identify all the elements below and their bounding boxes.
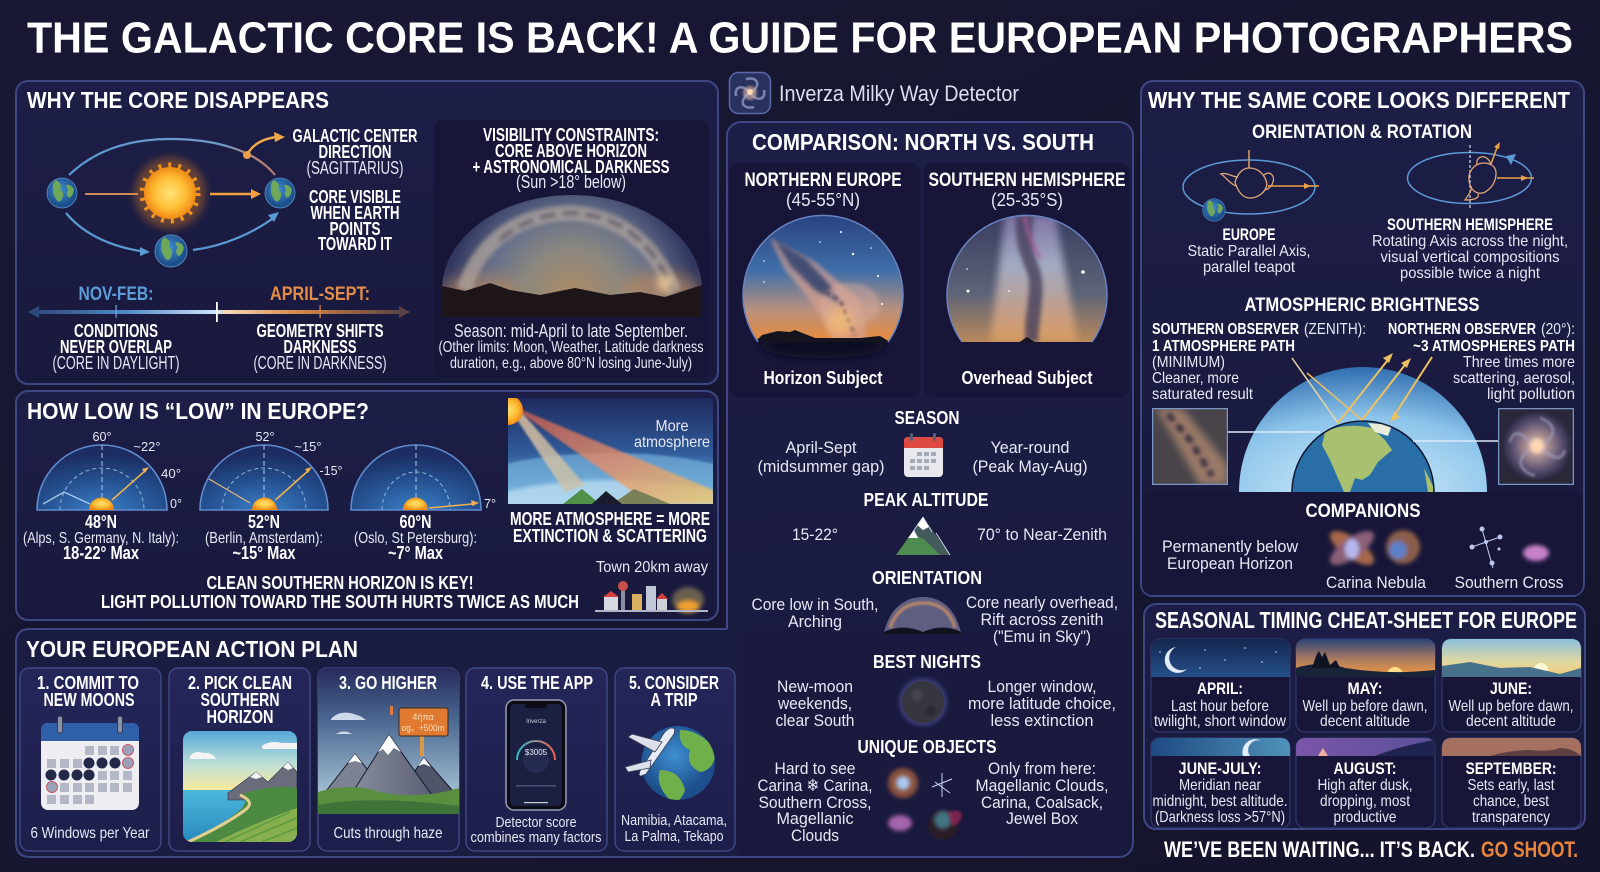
heading: action plan: YOUR EUROPEAN ACTION PLAN xyxy=(26,636,358,662)
card 2: pick clean southern horizon: HORIZON xyxy=(206,707,274,727)
label: galactic center direction xyxy=(292,126,418,178)
row: peak altitude xyxy=(792,490,1107,555)
card 1: commit to new moons: NEW MOONS xyxy=(44,690,134,710)
row: best nights xyxy=(776,652,1116,730)
row: season xyxy=(758,408,1088,477)
row: unique objects xyxy=(758,737,1108,845)
text: southern observer: Cleaner, more xyxy=(1152,370,1239,387)
inset: visibility constraints xyxy=(434,120,709,377)
icon: phone with detector score xyxy=(506,700,566,810)
text: 60N: 60°N xyxy=(400,512,432,532)
text: 52N: ~15° Max xyxy=(232,543,296,563)
row: best nights: New-moon xyxy=(777,677,853,696)
card 1: commit to new moons: 1. COMMIT TO xyxy=(37,673,139,693)
text: southern rotating axis: possible twice a night xyxy=(1400,265,1541,282)
panel: your european action plan xyxy=(16,629,745,857)
arrow: galactic center direction xyxy=(243,132,285,159)
diagram: atmosphere paths over earth xyxy=(1228,353,1498,492)
icon: mountain xyxy=(896,517,950,555)
text: southern observer: (MINIMUM) xyxy=(1152,354,1225,371)
subpanel: southern hemisphere: SOUTHERN HEMISPHERE xyxy=(928,170,1126,191)
text: 52N: (Berlin, Amsterdam): xyxy=(205,530,323,547)
image: southern cross and cloud xyxy=(1454,526,1564,592)
month: august: productive xyxy=(1334,809,1397,826)
label: core visible: CORE VISIBLE xyxy=(309,187,401,207)
text: april-sept geometry: DARKNESS xyxy=(284,337,356,357)
row: season: April-Sept xyxy=(786,438,857,457)
month: may xyxy=(1296,639,1435,732)
month: september xyxy=(1442,738,1581,828)
image: mountains with elevation sign: 4ήπα xyxy=(412,712,434,722)
image: milky way arch over mountains xyxy=(440,195,702,317)
icon: earth bottom xyxy=(155,235,187,267)
month: august xyxy=(1296,738,1435,828)
icon: phone with detector score: Inverza xyxy=(526,719,546,725)
text: southern observer: saturated result xyxy=(1152,386,1254,403)
subpanel: southern hemisphere xyxy=(924,163,1129,397)
text: season note: (Other limits: Moon, Weather, Latitude darkness xyxy=(438,339,704,356)
row: orientation: Rift across zenith xyxy=(980,610,1104,629)
row: orientation: Arching xyxy=(788,612,842,631)
icon: inverza app logo xyxy=(730,72,770,114)
card 5: consider a trip xyxy=(615,668,735,851)
image: southern cross and cloud: Southern Cross xyxy=(1454,573,1564,592)
month: april: twilight, short window xyxy=(1154,713,1286,730)
row: unique objects: Carina, Coalsack, xyxy=(981,793,1103,812)
icon: arched milky way xyxy=(884,597,961,634)
row: best nights: less extinction xyxy=(990,711,1094,730)
text: april-sept geometry xyxy=(254,321,386,373)
row: unique objects: UNIQUE OBJECTS xyxy=(858,737,996,757)
month: june-july: midnight, best altitude. xyxy=(1152,793,1288,810)
month: june-july: Meridian near xyxy=(1179,777,1262,794)
text: northern observer: scattering, aerosol, xyxy=(1453,370,1575,387)
month: april xyxy=(1151,639,1290,732)
chart: altitude at 60N: 7° xyxy=(484,496,496,511)
row: unique objects: Clouds xyxy=(791,826,839,845)
label: core visible: POINTS xyxy=(330,219,380,239)
month: september: SEPTEMBER: xyxy=(1466,759,1556,778)
timeline: season split: APRIL-SEPT: xyxy=(270,284,370,305)
row: unique objects: Only from here: xyxy=(988,759,1096,778)
row: peak altitude: 70° to Near-Zenith xyxy=(977,525,1107,544)
icon: phone with detector score: $3005 xyxy=(525,748,548,757)
text: visibility constraints: (Sun >18° below) xyxy=(516,172,626,192)
text: nov-feb conditions xyxy=(52,321,180,373)
row: season: SEASON xyxy=(894,408,960,428)
label: galactic center direction: GALACTIC CENTER xyxy=(292,126,418,146)
card 5: consider a trip: A TRIP xyxy=(650,690,698,710)
icon: earth left xyxy=(47,178,77,208)
heading: comparison: COMPARISON: NORTH VS. SOUTH xyxy=(752,129,1094,155)
text: southern observer xyxy=(1152,321,1366,403)
subpanel: northern europe: (45-55°N) xyxy=(786,190,860,210)
panel: why the core disappears xyxy=(16,81,718,384)
heading: why the core disappears: WHY THE CORE DISAPPEARS xyxy=(27,87,329,113)
icon: plane and globe xyxy=(625,726,716,801)
card 4: use the app xyxy=(466,668,607,851)
subpanel: southern hemisphere: (25-35°S) xyxy=(991,190,1063,210)
image: overhead subject dome xyxy=(946,214,1108,342)
text: northern observer: Three times more xyxy=(1463,354,1575,371)
text: europe static axis: EUROPE xyxy=(1222,225,1276,244)
timeline: season split: NOV-FEB: xyxy=(78,284,154,305)
row: peak altitude: 15-22° xyxy=(792,525,838,544)
image: carina nebula xyxy=(1325,525,1426,592)
row: peak altitude: PEAK ALTITUDE xyxy=(864,490,988,510)
label: more atmosphere: atmosphere xyxy=(634,434,710,451)
diagram: earth orbit around the sun xyxy=(47,132,295,267)
subheading: companions: COMPANIONS xyxy=(1306,501,1420,522)
callout: clean southern horizon: CLEAN SOUTHERN HORIZON IS KEY! xyxy=(206,573,474,593)
chart: altitude at 48N: 40° xyxy=(161,466,181,481)
text: nov-feb conditions: CONDITIONS xyxy=(74,321,158,341)
label: more atmosphere: More xyxy=(656,418,689,435)
month: april: APRIL: xyxy=(1197,679,1243,698)
row: best nights: Longer window, xyxy=(988,677,1096,696)
text: extinction and scattering: MORE ATMOSPHERE = MORE xyxy=(510,509,710,529)
footer call to action: GO SHOOT. xyxy=(1481,837,1578,862)
subheading: orientation and rotation: ORIENTATION & ROTATION xyxy=(1252,122,1472,143)
chart: altitude at 52N xyxy=(200,429,342,510)
row: orientation: Core nearly overhead, xyxy=(966,593,1118,612)
subpanel: southern hemisphere: Overhead Subject xyxy=(962,368,1092,388)
image: carina nebula: Carina Nebula xyxy=(1326,573,1426,592)
card 3: go higher xyxy=(318,668,459,851)
month: may: MAY: xyxy=(1348,679,1382,698)
chart: altitude at 48N xyxy=(37,429,182,511)
icon: sun xyxy=(134,157,206,229)
month: june: Well up before dawn, xyxy=(1448,698,1574,715)
card 5: consider a trip: 5. CONSIDER xyxy=(629,673,719,693)
card 3: go higher: 3. GO HIGHER xyxy=(339,673,437,693)
chart: altitude at 48N: 60° xyxy=(92,429,112,444)
row: orientation xyxy=(752,568,1118,646)
row: season: (Peak May-Aug) xyxy=(972,457,1088,476)
label: core visible: TOWARD IT xyxy=(318,234,392,254)
chart: altitude at 52N: -15° xyxy=(320,463,342,478)
card 1: commit to new moons xyxy=(20,668,161,851)
text: europe static axis: parallel teapot xyxy=(1203,259,1296,276)
text: southern observer: SOUTHERN OBSERVER xyxy=(1152,321,1299,338)
icon: calendar xyxy=(904,433,943,477)
footer call to action: WE’VE BEEN WAITING... IT’S BACK. xyxy=(1164,837,1475,862)
month: june-july: JUNE-JULY: xyxy=(1178,759,1262,778)
month: august: dropping, most xyxy=(1320,793,1410,810)
row: unique objects: Magellanic xyxy=(776,809,854,828)
chart: altitude at 60N xyxy=(351,445,496,511)
text: 52N xyxy=(205,512,323,563)
label: core visible: WHEN EARTH xyxy=(310,203,400,223)
panel: how low is low in europe xyxy=(16,391,800,620)
card 4: use the app: 4. USE THE APP xyxy=(481,673,593,693)
text: southern rotating axis: Rotating Axis across the night, xyxy=(1372,233,1568,250)
month: may: decent altitude xyxy=(1320,713,1410,730)
icon: earth right xyxy=(265,178,295,208)
card 4: use the app: combines many factors xyxy=(470,829,602,846)
chart: altitude at 48N: ~22° xyxy=(134,439,160,454)
card 5: consider a trip: La Palma, Tekapo xyxy=(624,828,724,845)
icon: new-moon calendar xyxy=(41,716,139,810)
row: unique objects: Southern Cross, xyxy=(758,793,872,812)
text: southern observer: 1 ATMOSPHERE PATH xyxy=(1152,338,1295,355)
card 2: pick clean southern horizon: 2. PICK CLEAN xyxy=(188,673,292,693)
text: southern rotating axis: SOUTHERN HEMISPHERE xyxy=(1387,215,1553,234)
row: best nights: clear South xyxy=(776,711,854,730)
card 1: commit to new moons: 6 Windows per Year xyxy=(30,825,150,842)
row: season: (midsummer gap) xyxy=(758,457,884,476)
month: june-july: (Darkness loss >57°N) xyxy=(1155,809,1285,826)
text: 60N xyxy=(354,512,477,563)
text: visibility constraints: VISIBILITY CONSTRAINTS: xyxy=(483,125,659,145)
text: visibility constraints: CORE ABOVE HORIZON xyxy=(495,141,647,161)
subheading: atmospheric brightness: ATMOSPHERIC BRIGHTNESS xyxy=(1244,295,1480,316)
image: sun beams through atmosphere xyxy=(508,398,713,504)
card 2: pick clean southern horizon: SOUTHERN xyxy=(200,690,280,710)
image: saturated milky way from south xyxy=(1152,408,1228,485)
card 3: go higher: Cuts through haze xyxy=(334,825,443,842)
month: june-july xyxy=(1151,738,1290,828)
image: mountains with elevation sign: og。+500m xyxy=(402,723,444,733)
row: unique objects: Jewel Box xyxy=(1006,809,1078,828)
row: orientation: ("Emu in Sky") xyxy=(993,627,1091,646)
callout: clean southern horizon xyxy=(101,573,579,612)
month: june xyxy=(1442,639,1581,732)
icon: town with light dome xyxy=(595,581,708,613)
text: extinction and scattering xyxy=(510,509,710,546)
icon: new moon xyxy=(899,678,947,726)
month: april: Last hour before xyxy=(1171,698,1269,715)
text: northern observer xyxy=(1388,321,1575,403)
label: more atmosphere xyxy=(634,418,710,451)
text: 60N: (Oslo, St Petersburg): xyxy=(354,530,477,547)
subpanel: northern europe: Horizon Subject xyxy=(764,368,882,388)
month: september: chance, best xyxy=(1473,793,1549,810)
month: may: Well up before dawn, xyxy=(1302,698,1428,715)
label: inverza milky way detector: Inverza Milky Way Detector xyxy=(779,81,1019,106)
text: northern observer: NORTHERN OBSERVER xyxy=(1388,321,1536,338)
text: southern rotating axis: visual vertical compositions xyxy=(1380,249,1560,266)
icons: deep sky objects xyxy=(888,768,962,840)
text: season note: Season: mid-April to late September. xyxy=(454,321,688,341)
text: 48N xyxy=(23,512,179,563)
callout: clean southern horizon: LIGHT POLLUTION TOWARD THE SOUTH HURTS TWICE AS MUCH xyxy=(101,592,579,612)
text: 48N: (Alps, S. Germany, N. Italy): xyxy=(23,530,179,547)
heading: how low is low: HOW LOW IS “LOW” IN EUROPE? xyxy=(27,398,369,424)
chart: altitude at 52N: 52° xyxy=(256,429,274,444)
panel: why the same core looks different xyxy=(1141,81,1584,596)
text: 60N: ~7° Max xyxy=(388,543,443,563)
image: mountains with elevation sign xyxy=(318,668,459,814)
text: visibility constraints xyxy=(472,125,670,192)
text: permanently below horizon xyxy=(1162,537,1299,573)
month: september: transparency xyxy=(1472,809,1550,826)
month: june: JUNE: xyxy=(1490,679,1532,698)
text: northern observer: light pollution xyxy=(1487,386,1575,403)
text: europe static axis: Static Parallel Axis, xyxy=(1188,243,1310,260)
image: spiral galaxy from north xyxy=(1498,408,1574,485)
chart: altitude at 48N: 0° xyxy=(170,496,182,511)
panel: seasonal timing cheat-sheet xyxy=(1144,604,1585,829)
text: visibility constraints: + ASTRONOMICAL DARKNESS xyxy=(472,157,670,177)
row: unique objects: Hard to see xyxy=(774,759,856,778)
text: northern observer: (20°): xyxy=(1541,321,1575,338)
label: galactic center direction: (SAGITTARIUS) xyxy=(306,158,404,178)
card 5: consider a trip: Namibia, Atacama, xyxy=(621,812,727,829)
card 4: use the app: Detector score xyxy=(496,814,576,831)
label: town 20km away: Town 20km away xyxy=(596,559,708,576)
row: best nights: more latitude choice, xyxy=(968,694,1116,713)
text: 52N: 52°N xyxy=(248,512,280,532)
row: orientation: ORIENTATION xyxy=(872,568,982,588)
text: season note: duration, e.g., above 80°N losing June-July) xyxy=(450,355,692,372)
month: september: Sets early, last xyxy=(1468,777,1555,794)
subpanel: northern europe xyxy=(729,163,920,397)
row: best nights: weekends, xyxy=(777,694,852,713)
text: 48N: 48°N xyxy=(85,512,117,532)
text: april-sept geometry: (CORE IN DARKNESS) xyxy=(254,353,386,373)
subpanel: northern europe: NORTHERN EUROPE xyxy=(744,170,902,191)
row: orientation: Core low in South, xyxy=(752,595,878,614)
text: season note xyxy=(438,321,704,372)
text: northern observer: ~3 ATMOSPHERES PATH xyxy=(1413,338,1575,355)
chart: altitude at 52N: ~15° xyxy=(294,439,322,454)
month: august: High after dusk, xyxy=(1318,777,1412,794)
card 2: pick clean southern horizon xyxy=(169,668,310,851)
row: season: Year-round xyxy=(990,438,1070,457)
text: nov-feb conditions: (CORE IN DAYLIGHT) xyxy=(52,353,180,373)
label: core visible xyxy=(309,187,401,254)
row: unique objects: Magellanic Clouds, xyxy=(976,776,1108,795)
text: southern rotating axis xyxy=(1372,215,1568,282)
month: august: AUGUST: xyxy=(1334,759,1396,778)
panel: comparison north vs south xyxy=(727,122,1133,857)
text: southern observer: (ZENITH): xyxy=(1304,321,1366,338)
text: europe static axis xyxy=(1188,225,1310,276)
text: extinction and scattering: EXTINCTION & SCATTERING xyxy=(513,526,707,546)
diagram: europe parallel teapot xyxy=(1183,150,1319,221)
text: april-sept geometry: GEOMETRY SHIFTS xyxy=(256,321,384,341)
text: permanently below horizon: Permanently below xyxy=(1162,537,1299,556)
row: best nights: BEST NIGHTS xyxy=(873,652,981,672)
row: unique objects: Carina ❄ Carina, xyxy=(758,776,872,795)
text: 48N: 18-22° Max xyxy=(63,543,139,563)
month: june: decent altitude xyxy=(1466,713,1556,730)
timeline: season split xyxy=(28,284,410,322)
text: nov-feb conditions: NEVER OVERLAP xyxy=(60,337,172,357)
label: galactic center direction: DIRECTION xyxy=(318,142,392,162)
diagram: southern rotated teapot xyxy=(1408,142,1534,210)
image: coastal landscape xyxy=(183,731,297,842)
text: permanently below horizon: European Horizon xyxy=(1167,554,1293,573)
image: horizon subject dome xyxy=(740,215,910,358)
